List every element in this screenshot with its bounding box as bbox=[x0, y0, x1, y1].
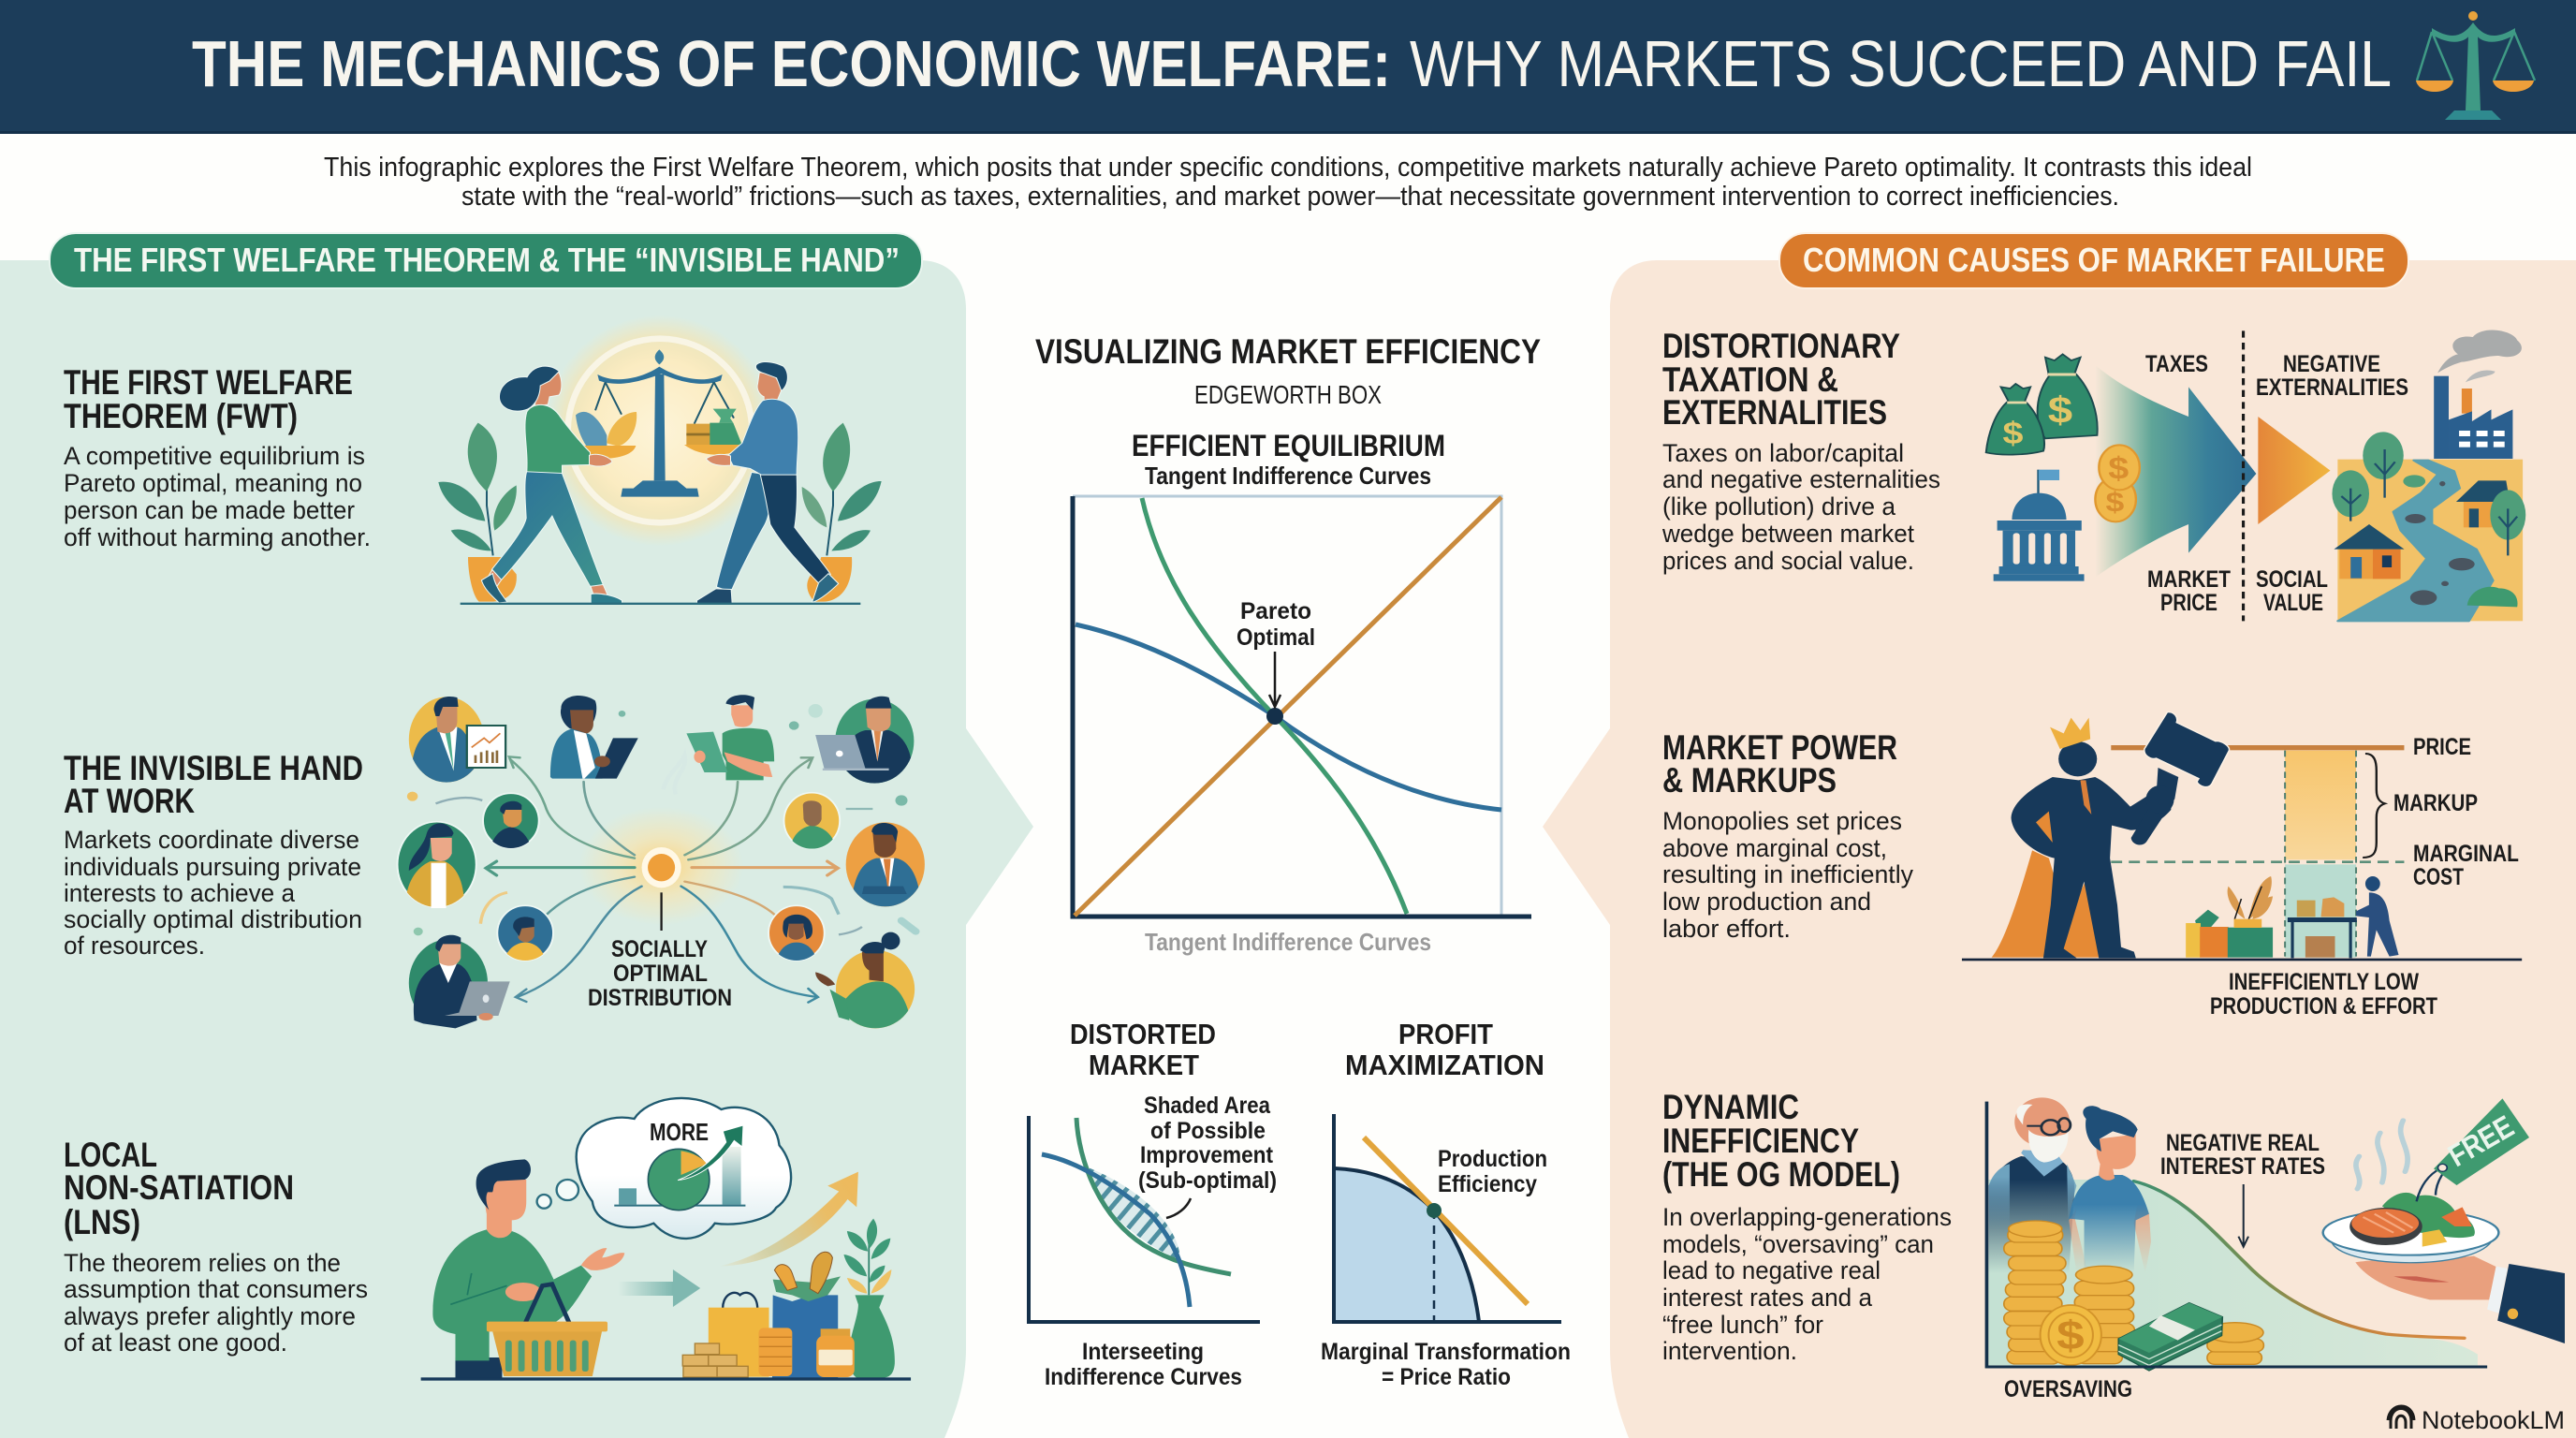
labels: price, markup, marginal cost: COST bbox=[2413, 864, 2464, 890]
label: pareto optimal bbox=[1237, 598, 1315, 707]
icon: balance scale bbox=[2416, 11, 2535, 120]
chart: edgeworth box bbox=[1073, 496, 1531, 917]
person: man with tablet bbox=[664, 695, 774, 794]
heading: profit maximization: MAXIMIZATION bbox=[1345, 1049, 1544, 1081]
label: pareto optimal: Optimal bbox=[1237, 624, 1315, 651]
arrow: negative rates bbox=[2238, 1184, 2248, 1247]
text block: FWT bbox=[64, 363, 371, 551]
label: socially optimal distribution: OPTIMAL bbox=[613, 961, 708, 987]
text block: invisible hand: of resources. bbox=[64, 932, 205, 960]
text block: distortionary taxation: prices and social value. bbox=[1662, 547, 1914, 575]
text block: distortionary taxation: wedge between market bbox=[1661, 520, 1914, 548]
annotation: production efficiency: Efficiency bbox=[1438, 1171, 1537, 1197]
text block: invisible hand: socially optimal distribution bbox=[64, 905, 362, 933]
caption: intersecting curves: Interseeting bbox=[1082, 1339, 1204, 1365]
caption: marginal transformation: Marginal Transformation bbox=[1321, 1339, 1571, 1365]
gift boxes and plant bbox=[2186, 876, 2273, 958]
divider bbox=[2240, 330, 2247, 621]
chart caption: Tangent Indifference Curves bbox=[1145, 928, 1431, 956]
woman bbox=[482, 367, 622, 604]
panel: visualizing market efficiency bbox=[1029, 332, 1571, 1390]
text block: distortionary taxation: Taxes on labor/capital bbox=[1662, 439, 1904, 467]
label: socially optimal distribution: SOCIALLY bbox=[611, 936, 708, 962]
big coin bbox=[2041, 1305, 2101, 1365]
free tag bbox=[2434, 1098, 2529, 1185]
text block: dynamic inefficiency: (THE OG MODEL) bbox=[1662, 1155, 1900, 1194]
person: man with laptop top right bbox=[815, 697, 914, 784]
annotation: production efficiency: Production bbox=[1438, 1146, 1547, 1172]
person: small avatar 1 bbox=[483, 793, 539, 849]
free tag text: FREE bbox=[2442, 1108, 2520, 1173]
annotation: production efficiency bbox=[1438, 1146, 1547, 1197]
text block: distortionary taxation: and negative esternalities bbox=[1662, 465, 1940, 493]
text block: FWT: Pareto optimal, meaning no bbox=[64, 469, 362, 497]
text block: dynamic inefficiency: “free lunch” for bbox=[1662, 1311, 1823, 1339]
person: woman with clipboard bbox=[550, 696, 638, 779]
steam bbox=[2356, 1121, 2408, 1189]
label: pareto optimal: Pareto bbox=[1240, 598, 1311, 624]
polluted landscape bbox=[2332, 432, 2525, 621]
text block: distortionary taxation: DISTORTIONARY bbox=[1662, 327, 1900, 365]
title: WHY MARKETS SUCCEED AND FAIL bbox=[1410, 27, 2392, 100]
text block: distortionary taxation: (like pollution) drive a bbox=[1662, 492, 1896, 521]
heading: EDGEWORTH BOX bbox=[1194, 380, 1382, 409]
heading: profit maximization bbox=[1345, 1018, 1544, 1081]
text block: dynamic inefficiency: interest rates and a bbox=[1662, 1284, 1873, 1312]
labels: taxes and externalities: VALUE bbox=[2263, 590, 2323, 616]
illustration: tax wedge and externalities bbox=[1986, 330, 2525, 621]
text block: dynamic inefficiency: In overlapping-generations bbox=[1662, 1203, 1952, 1231]
thought cloud bbox=[537, 1098, 791, 1239]
person: small avatar 3 bbox=[783, 793, 840, 849]
annotation: shaded area bbox=[1138, 1093, 1277, 1194]
label: socially optimal distribution: DISTRIBUTION bbox=[588, 985, 732, 1011]
title: THE MECHANICS OF ECONOMIC WELFARE: bbox=[192, 27, 1391, 100]
labels: price, markup, marginal cost: MARGINAL bbox=[2413, 841, 2519, 867]
coin stacks bbox=[2004, 1221, 2263, 1364]
heading: EFFICIENT EQUILIBRIUM bbox=[1132, 429, 1445, 462]
illustration: shopper wanting more bbox=[421, 1098, 911, 1381]
monopolist bbox=[1992, 712, 2230, 958]
text block: market power: resulting in inefficiently bbox=[1662, 860, 1913, 888]
text block: distortionary taxation: TAXATION & bbox=[1662, 360, 1838, 399]
text block: market power: labor effort. bbox=[1662, 915, 1791, 943]
label: socially optimal distribution bbox=[588, 936, 732, 1011]
wedge arrow bbox=[2095, 365, 2256, 578]
text block: distortionary taxation bbox=[1661, 327, 1940, 575]
markup diagram bbox=[2111, 745, 2404, 958]
table and worker bbox=[2288, 876, 2399, 958]
caption: marginal transformation bbox=[1321, 1339, 1571, 1390]
person: small avatar 2 bbox=[497, 905, 553, 961]
labels: taxes and externalities: SOCIAL bbox=[2256, 566, 2328, 593]
intro text bbox=[324, 153, 2252, 212]
text block: FWT: THEOREM (FWT) bbox=[64, 397, 298, 435]
text block: local non-satiation: assumption that consumers bbox=[64, 1275, 368, 1303]
labels: oversaving chart: NEGATIVE REAL bbox=[2166, 1130, 2320, 1156]
labels: oversaving chart: OVERSAVING bbox=[2004, 1376, 2132, 1402]
illustration: network of market participants bbox=[398, 695, 925, 1028]
text block: dynamic inefficiency bbox=[1662, 1088, 1952, 1365]
center node bbox=[642, 847, 681, 931]
illustration: tax wedge and externalities: $ bbox=[2003, 416, 2024, 450]
coins: $ bbox=[2105, 486, 2124, 518]
panel: market failure bbox=[1543, 233, 2576, 1438]
labels: taxes and externalities: EXTERNALITIES bbox=[2256, 374, 2408, 401]
axes bbox=[1986, 1102, 2487, 1367]
labels: taxes and externalities: TAXES bbox=[2145, 351, 2208, 377]
illustration: tax wedge and externalities: $ bbox=[2048, 389, 2072, 432]
person: woman in yellow jacket bbox=[398, 822, 476, 908]
scale bbox=[576, 349, 742, 497]
labels: price, markup, marginal cost bbox=[2393, 734, 2519, 890]
text block: market power: low production and bbox=[1662, 888, 1871, 916]
text block: local non-satiation bbox=[64, 1136, 368, 1357]
text block: local non-satiation: (LNS) bbox=[64, 1203, 140, 1241]
illustration: oversaving and free lunch bbox=[1986, 1097, 2565, 1371]
text block: invisible hand: Markets coordinate diverse bbox=[64, 826, 359, 854]
labels: taxes and externalities bbox=[2145, 351, 2408, 616]
labels: oversaving chart: INTEREST RATES bbox=[2160, 1153, 2325, 1180]
illustration: monopolist and markup bbox=[1962, 712, 2522, 961]
intro text: This infographic explores the First Welfare Theorem, which posits that under specific conditions, competitive markets naturally achieve Pareto optimality. It contrasts this ideal bbox=[324, 153, 2252, 183]
text block: dynamic inefficiency: intervention. bbox=[1662, 1337, 1797, 1365]
annotation: shaded area: of Possible bbox=[1150, 1118, 1266, 1144]
caption: marginal transformation: = Price Ratio bbox=[1382, 1364, 1511, 1390]
annotation: shaded area: (Sub-optimal) bbox=[1138, 1167, 1277, 1194]
plants bbox=[438, 423, 882, 602]
title bbox=[192, 27, 2392, 100]
heading bbox=[1035, 332, 1541, 490]
labels: price, markup, marginal cost: MARKUP bbox=[2393, 790, 2478, 816]
basket bbox=[487, 1284, 607, 1376]
text block: local non-satiation: The theorem relies on the bbox=[64, 1249, 341, 1277]
heading: VISUALIZING MARKET EFFICIENCY bbox=[1035, 332, 1541, 371]
annotation: shaded area: Shaded Area bbox=[1144, 1093, 1271, 1119]
text block: invisible hand: THE INVISIBLE HAND bbox=[64, 749, 363, 787]
panel heading pill: COMMON CAUSES OF MARKET FAILURE bbox=[1803, 241, 2385, 279]
arrows to participants bbox=[486, 756, 838, 1003]
text block: FWT: off without harming another. bbox=[64, 523, 371, 551]
text block: local non-satiation: of at least one good. bbox=[64, 1328, 287, 1357]
text block: FWT: THE FIRST WELFARE bbox=[64, 363, 353, 402]
caption: intersecting curves: Indifference Curves bbox=[1045, 1364, 1242, 1390]
shopper bbox=[432, 1159, 624, 1378]
intro text: state with the “real-world” frictions—such as taxes, externalities, and market power—that necessitate government intervention to correct inefficiencies. bbox=[461, 182, 2119, 212]
hand and sleeve bbox=[2355, 1256, 2565, 1343]
text block: dynamic inefficiency: models, “oversaving” can bbox=[1662, 1230, 1934, 1258]
caption: intersecting curves bbox=[1045, 1339, 1242, 1390]
text block: invisible hand: AT WORK bbox=[64, 782, 195, 820]
heading: distorted market bbox=[1070, 1018, 1216, 1081]
teal arrow bbox=[618, 1269, 700, 1307]
chart: profit maximization bbox=[1334, 1114, 1561, 1322]
decorative marks bbox=[407, 704, 915, 935]
caption: inefficiently low production: PRODUCTION & EFFORT bbox=[2210, 993, 2437, 1020]
labels: price, markup, marginal cost: PRICE bbox=[2413, 734, 2471, 760]
annotation: shaded area: Improvement bbox=[1140, 1142, 1274, 1168]
person: chart presenter bbox=[409, 697, 505, 784]
goods bbox=[682, 1219, 895, 1378]
big coin: $ bbox=[2056, 1313, 2085, 1359]
heading: Tangent Indifference Curves bbox=[1145, 462, 1431, 490]
person: man with crossed arms bbox=[846, 822, 925, 906]
text block: local non-satiation: LOCAL bbox=[64, 1136, 157, 1174]
text block: market power: Monopolies set prices bbox=[1662, 807, 1902, 835]
orange wedge bbox=[2258, 417, 2330, 524]
text block: FWT: A competitive equilibrium is bbox=[64, 442, 365, 470]
cash stack bbox=[2118, 1303, 2222, 1371]
man bbox=[697, 362, 838, 604]
caption: inefficiently low production: INEFFICIENTLY LOW bbox=[2229, 969, 2419, 995]
labels: taxes and externalities: PRICE bbox=[2160, 590, 2217, 616]
text block: invisible hand bbox=[64, 749, 363, 960]
savings curve area bbox=[1988, 1180, 2478, 1365]
header banner bbox=[0, 0, 2576, 134]
panel heading pill: THE FIRST WELFARE THEOREM & THE “INVISIBLE HAND” bbox=[74, 241, 900, 279]
text block: local non-satiation: always prefer alightly more bbox=[64, 1302, 356, 1330]
coins: $ bbox=[2108, 451, 2129, 486]
panel heading pill bbox=[50, 233, 922, 288]
plate of food bbox=[2323, 1167, 2498, 1263]
heading: profit maximization: PROFIT bbox=[1398, 1018, 1493, 1050]
label: more: MORE bbox=[650, 1118, 709, 1146]
logo: NotebookLM: NotebookLM bbox=[2422, 1406, 2565, 1434]
text block: FWT: person can be made better bbox=[64, 496, 355, 524]
coins bbox=[2095, 445, 2140, 521]
person: man with laptop bottom left bbox=[409, 935, 510, 1028]
chart: distorted market bbox=[1029, 1116, 1260, 1322]
text block: dynamic inefficiency: DYNAMIC bbox=[1662, 1088, 1799, 1126]
person: small avatar 4 bbox=[768, 905, 825, 961]
older man bbox=[1988, 1097, 2076, 1273]
text block: market power bbox=[1662, 728, 1913, 943]
factory and smoke bbox=[2434, 330, 2522, 459]
labels: taxes and externalities: MARKET bbox=[2147, 566, 2231, 593]
woman bbox=[2069, 1106, 2151, 1273]
text block: distortionary taxation: EXTERNALITIES bbox=[1662, 393, 1887, 432]
labels: oversaving chart bbox=[2004, 1130, 2325, 1402]
heading: distorted market: DISTORTED bbox=[1070, 1018, 1216, 1050]
text block: market power: MARKET POWER bbox=[1662, 728, 1897, 767]
text block: dynamic inefficiency: INEFFICIENCY bbox=[1662, 1122, 1859, 1160]
text block: market power: above marginal cost, bbox=[1662, 834, 1887, 862]
heading: distorted market: MARKET bbox=[1089, 1049, 1199, 1081]
big fading arrow bbox=[718, 1172, 858, 1267]
caption: inefficiently low production bbox=[2210, 969, 2437, 1020]
text block: invisible hand: individuals pursuing private bbox=[64, 853, 361, 881]
person: woman gesturing bottom right bbox=[815, 932, 915, 1028]
text block: dynamic inefficiency: lead to negative real bbox=[1662, 1256, 1881, 1284]
text block: invisible hand: interests to achieve a bbox=[64, 879, 296, 907]
text block: local non-satiation: NON-SATIATION bbox=[64, 1168, 294, 1207]
panel: first welfare theorem bbox=[0, 233, 1033, 1438]
government building bbox=[1994, 470, 2085, 581]
money bags bbox=[1986, 354, 2098, 455]
labels: taxes and externalities: NEGATIVE bbox=[2283, 351, 2380, 377]
illustration: two people trading at balance scale bbox=[438, 315, 882, 605]
panel heading pill bbox=[1779, 233, 2408, 288]
text block: market power: & MARKUPS bbox=[1662, 761, 1837, 800]
